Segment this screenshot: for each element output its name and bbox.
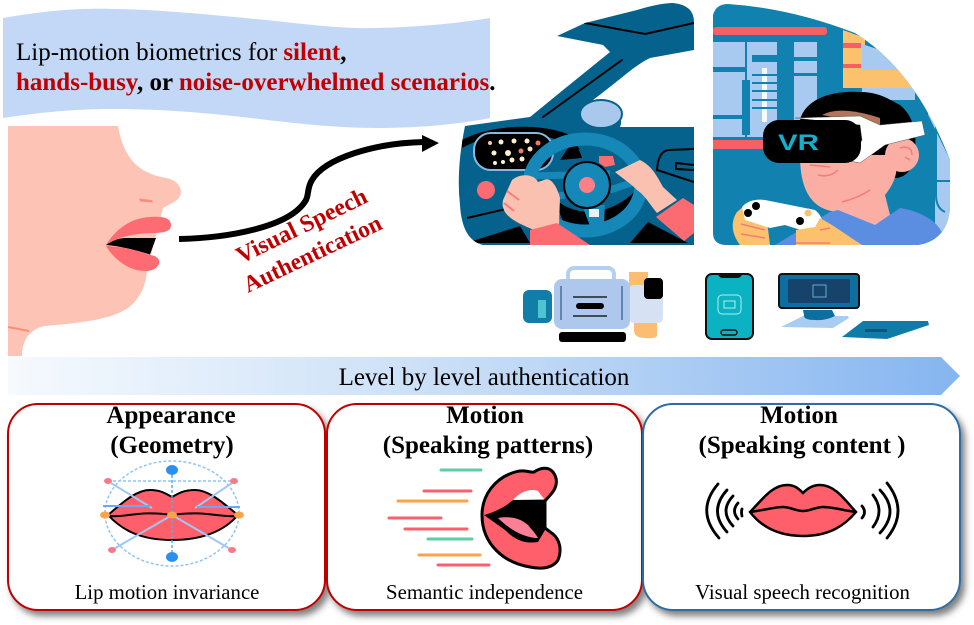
panel: speaking content	[643, 402, 960, 610]
panel: speaking patterns	[327, 402, 642, 610]
face profile with open lips	[8, 126, 181, 356]
banner text: , or noise-overwhelmed scenarios.	[137, 69, 495, 96]
banner text: hands-busy	[16, 69, 139, 96]
icon: camera with wearable	[523, 268, 663, 342]
rotated label: visual speech authentication: Authentication	[239, 210, 386, 298]
mirror	[580, 100, 622, 128]
arrow: face to devices	[179, 135, 439, 239]
caption: Semantic independence	[386, 581, 583, 604]
level arrow bar: Level by level authentication	[339, 364, 630, 391]
panel: appearance geometry	[8, 402, 325, 610]
heading: (Speaking content )	[699, 432, 905, 459]
icon: lips with geometry mesh	[100, 461, 244, 566]
icon: smartphone	[706, 274, 753, 339]
face	[800, 155, 896, 225]
banner text: silent,	[283, 39, 347, 66]
headset	[795, 116, 925, 163]
instrument cluster	[474, 133, 553, 170]
hands and sleeves	[503, 175, 560, 230]
heading: Motion	[446, 402, 524, 429]
heading: (Geometry)	[110, 432, 234, 459]
icon: desktop monitor and tablet	[779, 274, 929, 339]
steering wheel	[529, 139, 641, 231]
heading: Appearance	[106, 402, 236, 429]
level arrow bar	[8, 357, 960, 395]
heading: Motion	[760, 402, 838, 429]
banner: lip-motion biometrics	[3, 9, 495, 128]
illustration: person with VR headset	[705, 0, 955, 250]
icon: speed lines and open mouth	[389, 468, 560, 568]
banner text: Lip-motion biometrics for	[16, 39, 283, 66]
illustration: person with VR headset: VR	[778, 130, 819, 155]
controller and hands	[733, 205, 770, 245]
rotated label: visual speech authentication: Visual Speech	[232, 184, 372, 269]
heading: (Speaking patterns)	[383, 432, 593, 459]
illustration: driver at steering wheel	[450, 0, 700, 250]
icon: lips with sound waves	[707, 483, 898, 538]
caption: Lip motion invariance	[75, 581, 259, 604]
caption: Visual speech recognition	[695, 581, 910, 604]
device icons row	[523, 268, 929, 342]
shirt	[775, 208, 945, 245]
hair	[800, 92, 915, 178]
